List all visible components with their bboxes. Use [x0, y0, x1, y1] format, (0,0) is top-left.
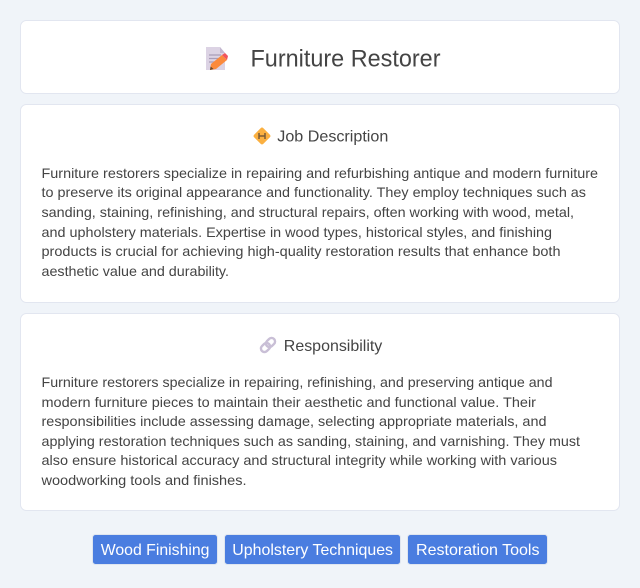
- text block: responsibility: Furniture restorers specialize in repairing, refinishing, and preserving antique and: [42, 374, 552, 390]
- tag: upholstery techniques: [224, 534, 400, 564]
- tag: wood finishing: Wood Finishing: [101, 542, 210, 559]
- tag: restoration tools: Restoration Tools: [416, 542, 540, 559]
- text block: responsibility: applying restoration techniques such as sanding, staining, and varnishing. They must: [42, 433, 580, 449]
- text block: job description: and upholstery materials. Expertise in wood types, historical styles, and finishing: [42, 224, 552, 240]
- text block: responsibility: also ensure historical accuracy and structural integrity while working with various: [42, 452, 557, 468]
- text block: responsibility: modern furniture pieces to maintain their aesthetic and functional value. Their: [42, 394, 536, 410]
- text block: responsibility: responsibilities include assessing damage, selecting appropriate materials, and: [42, 413, 546, 429]
- icon: document with pencil: [206, 47, 228, 70]
- text block: job description: to preserve its original appearance and functionality. They employ techniques such as: [42, 184, 586, 200]
- icon: construction diamond: [253, 127, 271, 145]
- text block: job description: products is crucial for achieving high-quality restoration results that enhance both: [42, 243, 560, 259]
- panel: job description: [20, 104, 620, 302]
- text block: job description: sanding, staining, refinishing, and structural repairs, often working with wood, metal,: [42, 204, 574, 220]
- heading: responsibility: Responsibility: [284, 338, 382, 355]
- title: Furniture Restorer: [250, 46, 441, 73]
- panel: title card: [20, 20, 620, 94]
- text block: job description: aesthetic value and durability.: [42, 263, 229, 279]
- tag: restoration tools: [408, 534, 548, 564]
- text block: job description: [42, 165, 598, 279]
- icon: chain link: [259, 336, 277, 354]
- panel: responsibility: [20, 314, 620, 510]
- text block: responsibility: [40, 374, 580, 488]
- tag: wood finishing: [92, 534, 218, 564]
- tag: upholstery techniques: Upholstery Techniques: [232, 542, 393, 559]
- text block: responsibility: woodworking tools and finishes.: [40, 472, 247, 488]
- heading: job description: Job Description: [277, 129, 388, 146]
- text block: job description: Furniture restorers specialize in repairing and refurbishing antique and modern furniture: [42, 165, 598, 181]
